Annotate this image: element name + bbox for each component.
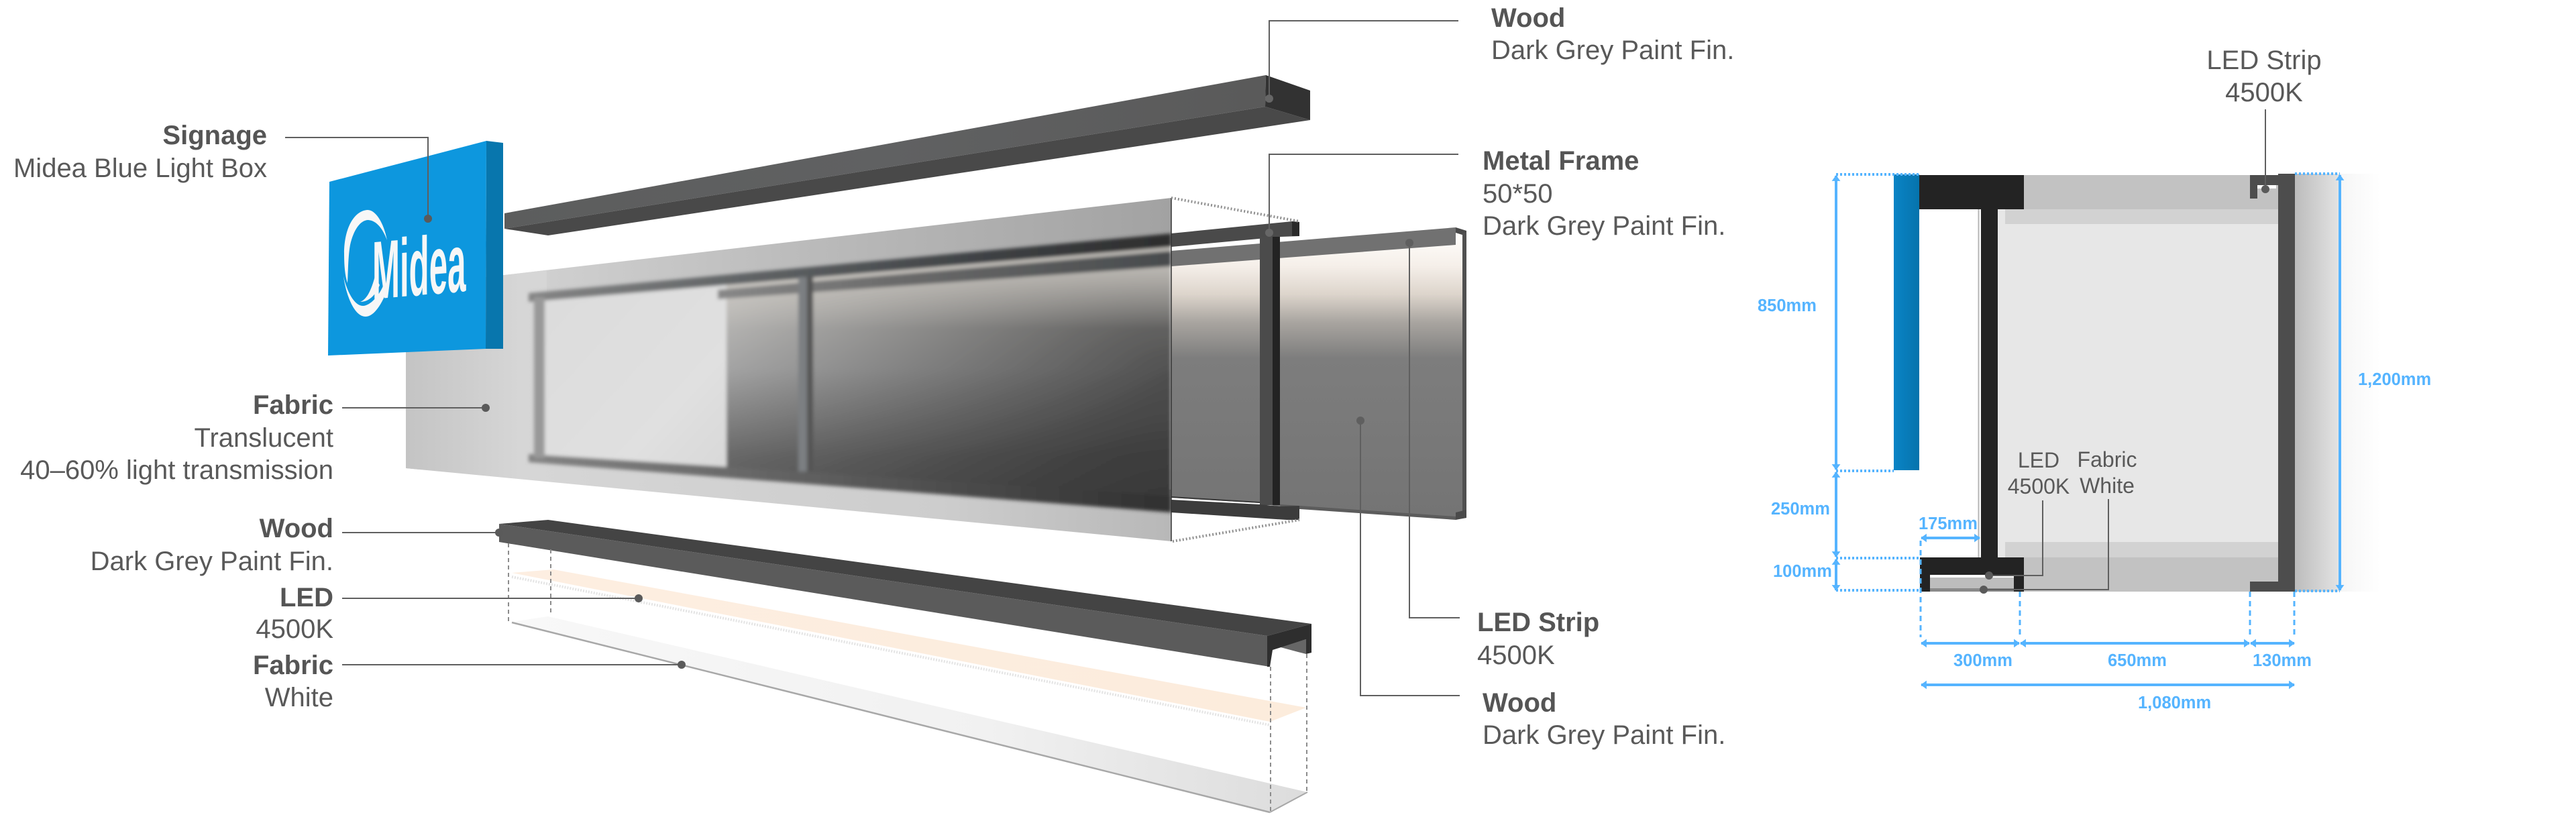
dimension: 250mm: 250mm: [1771, 500, 1830, 518]
lower LED strip: [512, 569, 1306, 725]
label: rear wood: Dark Grey Paint Fin.: [1483, 720, 1725, 750]
label: fabric translucent: Fabric: [253, 390, 333, 420]
label: LED strip: 4500K: [1477, 641, 1555, 670]
label: upper wood: Dark Grey Paint Fin.: [1491, 36, 1734, 65]
label: lower fabric: Fabric: [253, 651, 333, 680]
shadow behind post: [2295, 174, 2380, 592]
label: section LED strip: [2206, 46, 2322, 193]
label: upper wood: Wood: [1491, 3, 1565, 33]
dimension: 850mm: [1758, 174, 1919, 471]
signage light box: [328, 141, 503, 356]
dimension lines: [1758, 174, 2431, 712]
label: section fabric: White: [2080, 474, 2135, 498]
label: upper wood: [1265, 3, 1734, 103]
dimension: 175mm: 175mm: [1919, 514, 1978, 533]
exploded view: signage assembly: [328, 75, 1466, 812]
label: lower fabric: White: [265, 683, 333, 712]
front translucent fabric panel: [406, 198, 1299, 541]
grey soffit bottom: [2024, 557, 2279, 592]
label: metal frame: [1265, 146, 1725, 241]
label: section LED strip: LED Strip: [2206, 46, 2322, 75]
dimension: 1,200mm: [2295, 174, 2431, 591]
label: signage: Signage: [162, 121, 267, 150]
label: fabric translucent: Translucent: [195, 423, 333, 453]
dimension: 1,200mm: 1,200mm: [2358, 370, 2431, 389]
logo swoosh: [343, 210, 388, 317]
dashed assembly guides: [508, 543, 1307, 812]
grey soffit top: [2024, 175, 2279, 209]
lower wood channel: [499, 520, 1311, 667]
label: metal frame: Metal Frame: [1483, 146, 1639, 176]
label: fabric translucent: 40–60% light transmission: [20, 455, 333, 485]
lower white fabric: [512, 616, 1307, 812]
label: metal frame: Dark Grey Paint Fin.: [1483, 211, 1725, 241]
label: lower wood: [91, 514, 503, 576]
label: lower fabric: [253, 651, 686, 712]
label: section LED: LED: [2018, 448, 2059, 472]
dimension: 1,080mm: 1,080mm: [2138, 694, 2211, 712]
label: section LED: [1985, 448, 2070, 580]
label: lower wood: Dark Grey Paint Fin.: [91, 547, 333, 576]
label: signage: Midea Blue Light Box: [13, 154, 267, 183]
label: section LED: 4500K: [2008, 474, 2070, 498]
dimension: 130mm: 130mm: [2253, 651, 2312, 670]
dimension: 850mm: 850mm: [1758, 296, 1817, 315]
label: rear wood: Wood: [1483, 688, 1556, 718]
LED strip glow: [2257, 185, 2276, 188]
dimension: 650mm: 650mm: [2108, 651, 2167, 670]
label: LED strip: LED Strip: [1477, 608, 1599, 637]
label: rear wood: [1356, 417, 1725, 750]
label: section fabric: Fabric: [2078, 447, 2137, 472]
metal frame: [1171, 221, 1299, 520]
logo wordmark: Midea: [372, 216, 466, 317]
lower cavity with LED and fabric: [1930, 575, 2014, 592]
dimension: 300mm: 300mm: [1953, 651, 2012, 670]
dimension: 100mm: 100mm: [1773, 562, 1832, 581]
upper wood beam: [504, 75, 1310, 235]
right post with L brackets: [2250, 174, 2295, 592]
label: LED strip: [1405, 239, 1599, 670]
label: lower wood: Wood: [260, 514, 333, 543]
light panel: [1998, 209, 2279, 557]
metal frame section: [1919, 175, 2024, 592]
label: signage: [13, 121, 432, 223]
blue sign section: [1894, 174, 1919, 470]
label: lower LED: [256, 583, 643, 644]
label: metal frame: 50*50: [1483, 179, 1553, 209]
label: section LED strip: 4500K: [2225, 78, 2303, 107]
section drawing: [1894, 174, 2380, 592]
label: fabric translucent: [20, 390, 490, 485]
label: lower LED: 4500K: [256, 614, 333, 644]
label: lower LED: LED: [280, 583, 333, 612]
label: section fabric: [1980, 447, 2137, 594]
dimension guides: [1921, 541, 2294, 637]
rear fabric panel with LED glow: [1171, 227, 1466, 520]
dimension: 130mm: [2251, 643, 2312, 670]
